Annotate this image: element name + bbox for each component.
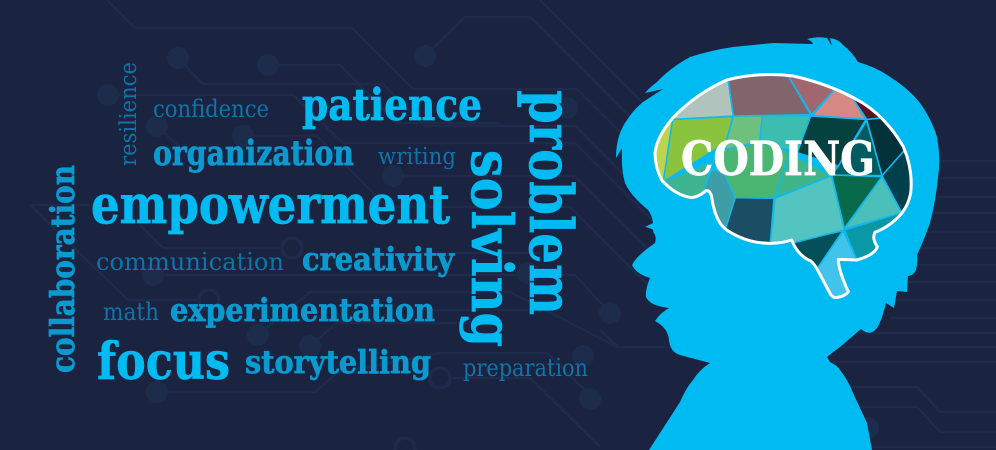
- word: collaboration: collaboration: [43, 165, 82, 373]
- word: empowerment: empowerment: [91, 174, 450, 236]
- child head silhouette: [616, 37, 939, 450]
- word: confidence: confidence: [153, 95, 269, 123]
- word: patience: patience: [302, 80, 482, 131]
- word: experimentation: experimentation: [170, 291, 435, 329]
- word: creativity: creativity: [302, 240, 455, 278]
- word: communication: communication: [96, 248, 284, 276]
- brain label: CODING: CODING: [681, 132, 875, 187]
- word cloud: [43, 62, 588, 392]
- word: storytelling: storytelling: [245, 343, 431, 381]
- word: resilience: resilience: [116, 62, 142, 166]
- brain: [650, 70, 920, 303]
- word: focus: focus: [97, 332, 230, 392]
- word: problem: problem: [515, 90, 585, 315]
- word: organization: organization: [153, 133, 354, 174]
- brain outline: [655, 75, 911, 298]
- word: solving: solving: [458, 150, 524, 347]
- word: writing: writing: [378, 144, 456, 170]
- word: math: math: [103, 298, 159, 326]
- word: preparation: preparation: [463, 354, 588, 382]
